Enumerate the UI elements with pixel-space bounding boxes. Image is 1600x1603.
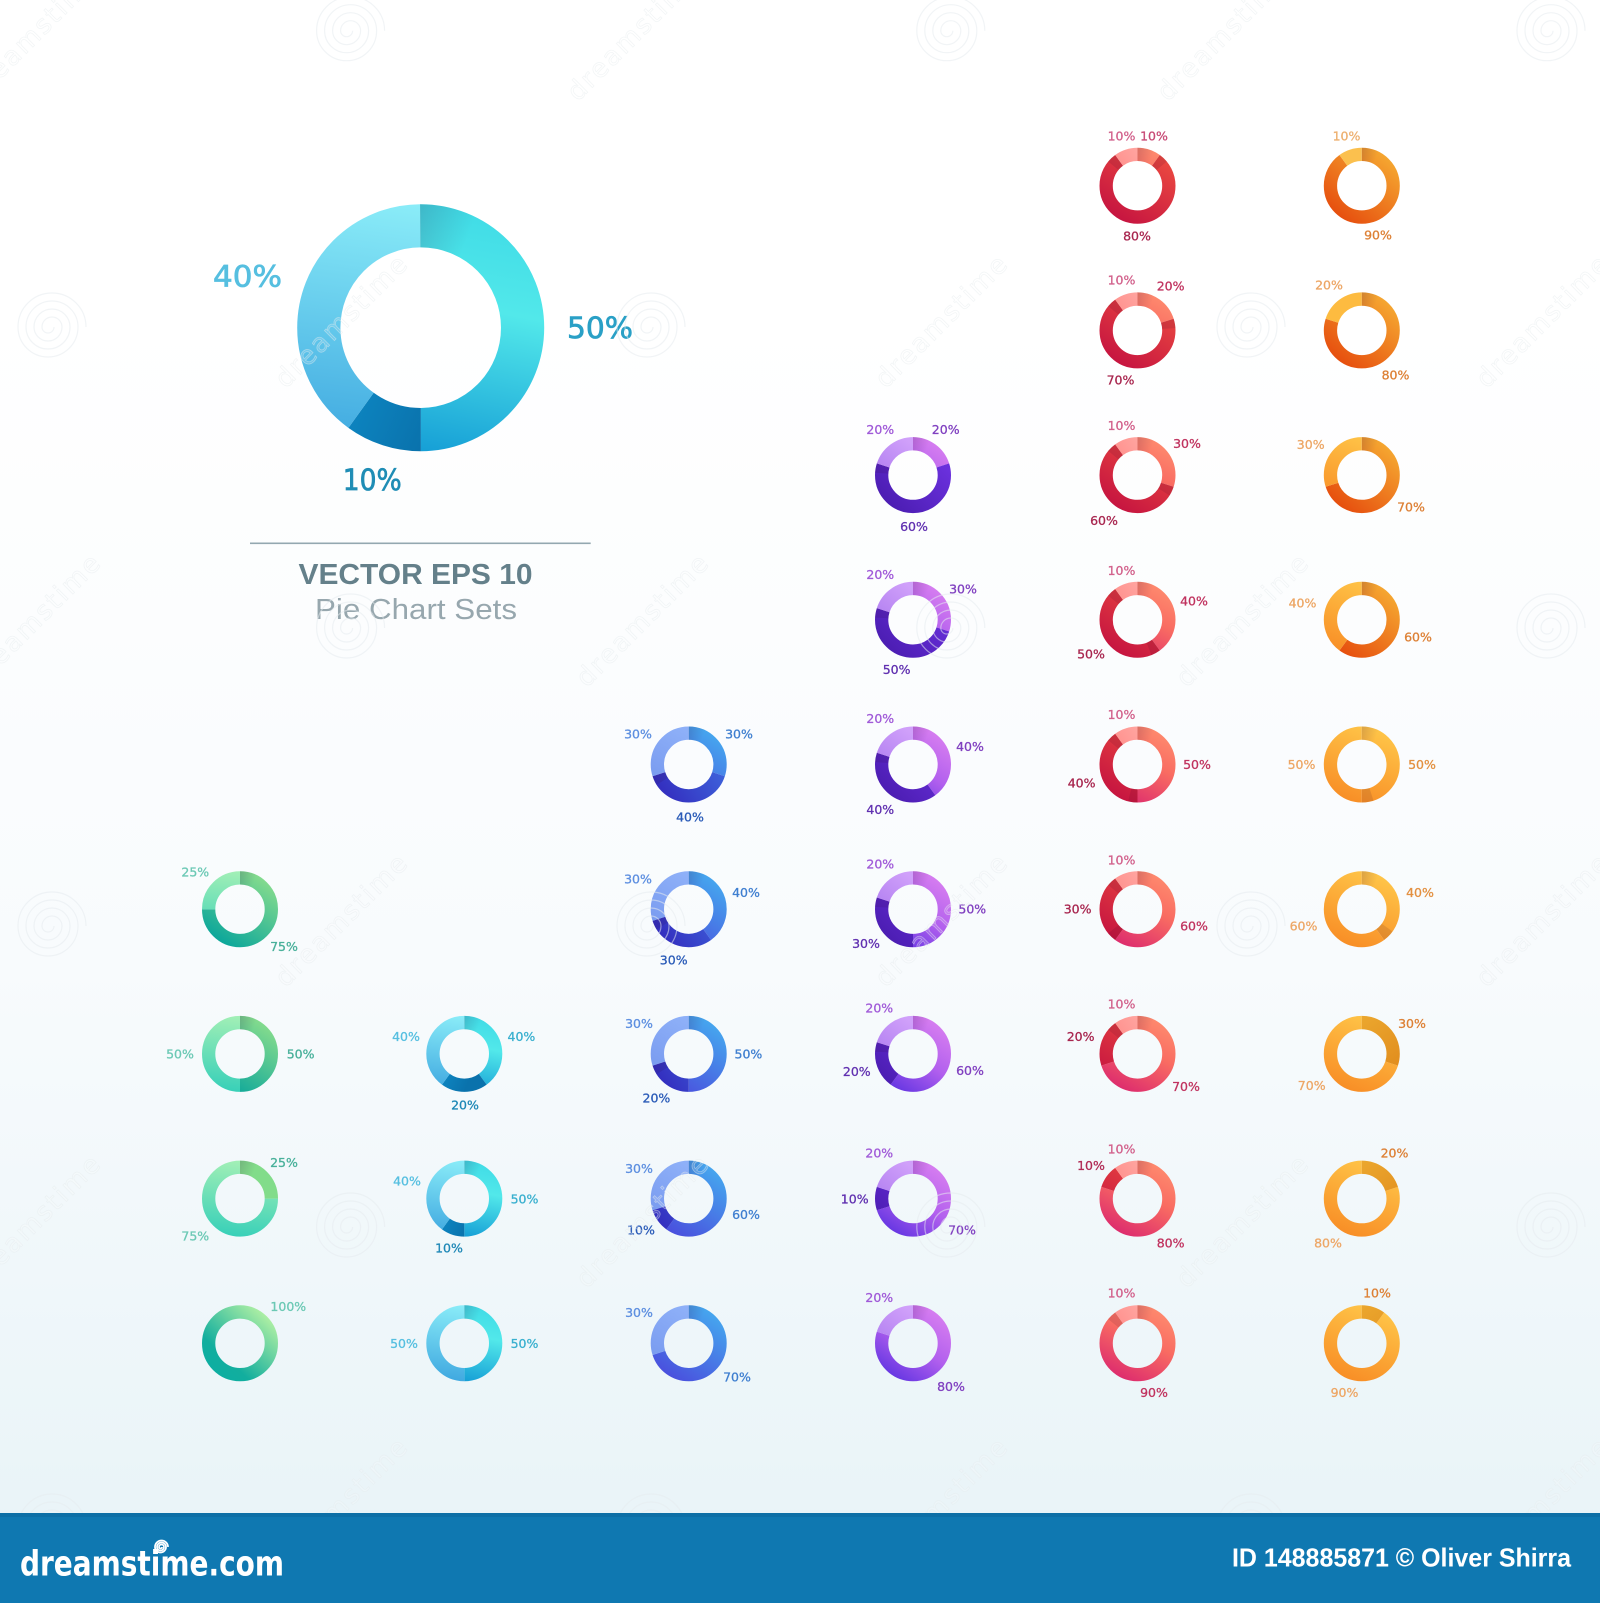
label: 40%: 40%: [213, 260, 282, 294]
donut: red 60 30 10: 30%: [1064, 902, 1092, 916]
donut: red 10 80 10: 80%: [1123, 228, 1151, 244]
donut: purple 80 20: 20%: [865, 1290, 893, 1305]
donut: red 20 70 10: 20%: [1157, 278, 1185, 294]
subheading: pie chart sets: Pie Chart Sets: [315, 594, 517, 626]
donut: green 50 50: [166, 1023, 315, 1085]
donut: purple 50 30 20: 30%: [852, 936, 880, 951]
donut: purple 80 20: 80%: [937, 1379, 965, 1394]
donut: cyan 50 10 40: 40%: [393, 1174, 421, 1188]
donut: purple 60 20 20: 60%: [956, 1063, 984, 1078]
donut: orange 70 30: 70%: [1397, 500, 1425, 514]
donut: orange 70 30: 30%: [1297, 437, 1325, 452]
donut: purple 40 40 20: 20%: [866, 711, 894, 726]
donut: cyan 50 50: 50%: [390, 1336, 418, 1351]
donut: red 90 10: [1106, 1286, 1169, 1400]
watermark overlay: dreamstime: [869, 1431, 1015, 1577]
donut: green 75 25: [181, 864, 298, 954]
label: 10%: 10%: [343, 463, 402, 497]
donut: red 70 20 10: 10%: [1108, 996, 1136, 1012]
donut: red 30 60 10: 10%: [1108, 418, 1136, 433]
watermark overlay: dreamstime: [1170, 547, 1316, 693]
donut: blue 70 30: 30%: [625, 1305, 653, 1320]
donut: orange 50 50: 50%: [1408, 757, 1436, 772]
donut: red 30 60 10: [1090, 418, 1201, 528]
donut: orange 60 40: 40%: [1289, 596, 1317, 610]
donut: red 40 50 10: [1077, 563, 1208, 662]
donut: red 80 10 10: [1077, 1142, 1185, 1250]
donut: orange 60 40: [1289, 588, 1432, 651]
donut: blue 30 40 30: [624, 726, 753, 824]
donut: cyan 50 10 40: 50%: [511, 1192, 539, 1206]
donut: red 40 50 10: 10%: [1108, 563, 1136, 578]
donut: purple 50 30 20: [852, 856, 986, 951]
donut: blue 50 20 30: 50%: [735, 1046, 762, 1062]
donut: blue 70 30: [625, 1305, 751, 1384]
watermark overlay: dreamstime: [570, 547, 716, 693]
donut: red 20 70 10: 10%: [1108, 272, 1136, 288]
donut: blue 70 30: 70%: [723, 1370, 751, 1384]
label: 50%: 50%: [567, 311, 633, 345]
donut: red 30 60 10: 60%: [1090, 513, 1118, 528]
donut: blue 30 40 30: 40%: [676, 810, 704, 824]
title block: [250, 542, 591, 626]
donut: green 50 50: 50%: [287, 1046, 315, 1062]
donut: blue 40 30 30: 40%: [732, 885, 760, 900]
heading: vector eps 10: VECTOR EPS 10: [298, 559, 532, 591]
watermark overlay: dreamstime: [269, 847, 415, 993]
donut: red 80 10 10: 80%: [1157, 1236, 1185, 1250]
donut: red 50 40 10: 50%: [1183, 757, 1211, 772]
donut: red 50 40 10: 40%: [1068, 776, 1096, 790]
donut: cyan 40 20 40: [392, 1023, 535, 1112]
donut: cyan 40 20 40: 40%: [392, 1029, 420, 1044]
donut: orange 60 40: 60%: [1404, 630, 1432, 644]
donut: blue 40 30 30: 30%: [660, 952, 688, 968]
donut: blue 50 20 30: 30%: [625, 1016, 653, 1031]
donut: green 25 75: [181, 1155, 298, 1244]
donut: purple 70 10 20: 70%: [948, 1222, 976, 1238]
donut: purple 20 60 20: [866, 422, 960, 534]
donut: cyan 40 20 40: 40%: [508, 1029, 535, 1044]
donut: purple 30 50 20: 20%: [866, 567, 894, 582]
donut: purple 70 10 20: 10%: [841, 1192, 869, 1206]
donut: cyan 50 10 40: [393, 1167, 539, 1256]
donut: red 90 10: 10%: [1108, 1286, 1136, 1300]
donut: red 60 30 10: 10%: [1108, 852, 1136, 867]
donut: blue 50 20 30: [625, 1016, 762, 1106]
watermark overlay: dreamstime: [269, 1431, 415, 1577]
donut: purple 30 50 20: [866, 567, 977, 677]
donut: orange 80 20: 80%: [1382, 368, 1410, 382]
watermark overlay: dreamstime: [1170, 1148, 1316, 1294]
donut: red 60 30 10: 60%: [1180, 918, 1208, 934]
watermark overlay: dreamstime: [269, 248, 415, 394]
donut: blue 60 10 30: [625, 1161, 760, 1238]
donut: cyan 40 20 40: 20%: [451, 1098, 479, 1112]
footer bar: [0, 1513, 1600, 1603]
donut: purple 60 20 20: [843, 1000, 984, 1085]
donut: purple 30 50 20: 30%: [949, 582, 977, 596]
watermark overlay: dreamstime: [570, 1148, 716, 1294]
donut: purple 20 60 20: 20%: [866, 422, 894, 437]
donut: blue 60 10 30: 60%: [732, 1207, 760, 1222]
donut: orange 30 70: [1298, 1016, 1426, 1093]
donut: green 75 25: 25%: [181, 864, 209, 880]
donut: orange 90 10: [1330, 128, 1393, 242]
donut: red 70 20 10: 70%: [1172, 1079, 1200, 1094]
donut: orange 10 90: 10%: [1363, 1286, 1391, 1300]
donut: red 80 10 10: 10%: [1108, 1142, 1136, 1156]
logo text: dreamstime.com: [20, 1545, 284, 1585]
donut: orange 20 80: [1314, 1146, 1409, 1250]
donut: orange 10 90: 90%: [1331, 1385, 1359, 1400]
donut: blue 40 30 30: 30%: [624, 872, 652, 886]
donut: red 10 80 10: [1106, 128, 1169, 244]
donut: orange 20 80: 20%: [1381, 1146, 1409, 1160]
donut: orange 30 70: 70%: [1298, 1078, 1326, 1093]
donut: purple 40 40 20: 40%: [956, 739, 984, 754]
donut: orange 40 60: 40%: [1406, 885, 1434, 900]
donut: red 50 40 10: 10%: [1108, 707, 1136, 722]
donut: orange 30 70: 30%: [1398, 1016, 1426, 1031]
donut: green 25 75: 25%: [270, 1155, 298, 1170]
donut: red 80 10 10: 10%: [1077, 1158, 1105, 1173]
donut: purple 80 20: [865, 1290, 965, 1394]
donut: red 20 70 10: [1106, 272, 1185, 388]
donut: cyan 50 50: [390, 1312, 539, 1375]
donut: purple 30 50 20: 50%: [883, 662, 911, 677]
donut: purple 40 40 20: 40%: [866, 802, 894, 817]
donut: orange 90 10: 90%: [1364, 228, 1392, 242]
donut: red 20 70 10: 70%: [1107, 372, 1135, 388]
panel: main donut chart 50 10 40: [213, 226, 633, 497]
donut: red 50 40 10: [1068, 707, 1211, 796]
donut: red 10 80 10: 10%: [1140, 128, 1168, 144]
donut: red 40 50 10: 40%: [1180, 594, 1208, 608]
donut: red 70 20 10: [1067, 996, 1200, 1094]
donut: red 30 60 10: 30%: [1173, 436, 1201, 451]
donut: green 100: 100%: [270, 1299, 306, 1314]
donut: purple 70 10 20: [841, 1146, 976, 1238]
donut: cyan 50 10 40: 10%: [435, 1240, 463, 1256]
donut: orange 20 80: 80%: [1314, 1236, 1342, 1250]
donut: purple 60 20 20: 20%: [865, 1000, 893, 1016]
donut: purple 40 40 20: [866, 711, 984, 817]
donut: blue 60 10 30: 10%: [627, 1222, 655, 1238]
donut: orange 40 60: [1290, 878, 1434, 941]
donut: red 60 30 10: [1064, 852, 1208, 941]
donut: blue 50 20 30: 20%: [643, 1090, 670, 1106]
donut: purple 60 20 20: 20%: [843, 1064, 871, 1079]
donut: orange 80 20: [1315, 278, 1410, 382]
icon: footer spiral: [155, 1540, 168, 1552]
watermark overlay: dreamstime: [869, 248, 1015, 394]
donut: blue 60 10 30: 30%: [625, 1161, 653, 1176]
donut: red 70 20 10: 20%: [1067, 1029, 1095, 1044]
donut: green 100: [209, 1299, 306, 1375]
donut: red 90 10: 90%: [1140, 1385, 1168, 1400]
donut: green 25 75: 75%: [181, 1228, 209, 1244]
donut: blue 40 30 30: [624, 872, 760, 968]
donut: green 50 50: 50%: [166, 1046, 194, 1062]
donut: purple 20 60 20: 60%: [900, 519, 928, 534]
donut: green 75 25: 75%: [270, 939, 298, 954]
donut: orange 90 10: 10%: [1333, 128, 1361, 144]
donut: orange 40 60: 60%: [1290, 918, 1318, 934]
donut: purple 70 10 20: 20%: [865, 1146, 893, 1160]
donut: red 10 80 10: 10%: [1108, 128, 1136, 144]
image id and credit: ID 148885871 © Oliver Shirra: [1232, 1543, 1572, 1573]
donut: purple 50 30 20: 20%: [866, 856, 894, 872]
donut: orange 50 50: [1288, 733, 1436, 796]
donut: red 40 50 10: 50%: [1077, 646, 1105, 662]
donut: orange 10 90: [1330, 1286, 1393, 1400]
donut: cyan 50 50: 50%: [511, 1336, 539, 1351]
donut: orange 70 30: [1297, 437, 1425, 514]
donut: orange 80 20: 20%: [1315, 278, 1343, 292]
donut: orange 50 50: 50%: [1288, 757, 1316, 772]
donut: blue 30 40 30: 30%: [624, 726, 652, 742]
watermark overlay: dreamstime: [869, 847, 1015, 993]
donut: purple 20 60 20: 20%: [932, 422, 960, 437]
donut: purple 50 30 20: 50%: [958, 902, 986, 916]
donut: blue 30 40 30: 30%: [725, 726, 753, 742]
